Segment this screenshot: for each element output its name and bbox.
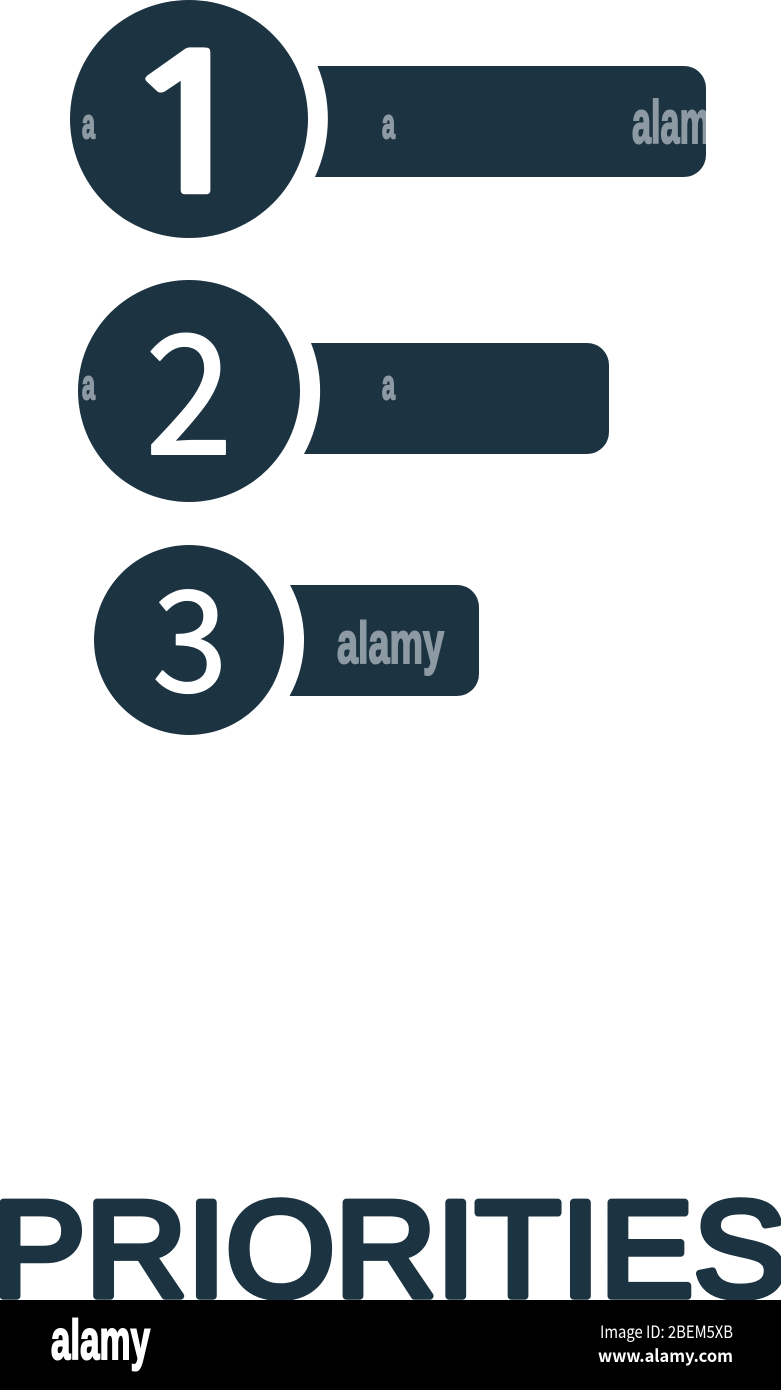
circle 2 [78, 280, 300, 502]
watermark letter in circle 2: a [82, 361, 95, 408]
watermark letter in bar 1: a [382, 100, 395, 147]
footer logo: alamy [51, 1308, 150, 1371]
title: PRIORITIES [0, 1173, 781, 1325]
footer band [0, 1300, 781, 1390]
number 3: 3 [152, 529, 228, 732]
image id: Image ID: 2BEM5XB [600, 1318, 733, 1343]
bar 3 [290, 585, 479, 696]
website: www.alamy.com [598, 1342, 733, 1367]
bar 2 [304, 343, 609, 454]
priority row 1 [70, 0, 710, 238]
watermark letter in bar 2: a [382, 361, 395, 408]
circle 1 [70, 0, 308, 238]
circle 3 [94, 545, 284, 735]
priority row 3 [94, 529, 479, 735]
watermark letter in circle 1: a [82, 100, 95, 147]
watermark word in bar 3: alamy [337, 611, 444, 676]
bar 1 [315, 66, 706, 177]
watermark word in bar 1: alam [632, 89, 710, 156]
priority row 2 [78, 261, 609, 502]
number 1: 1 [115, 33, 265, 221]
number 2: 2 [145, 261, 233, 502]
